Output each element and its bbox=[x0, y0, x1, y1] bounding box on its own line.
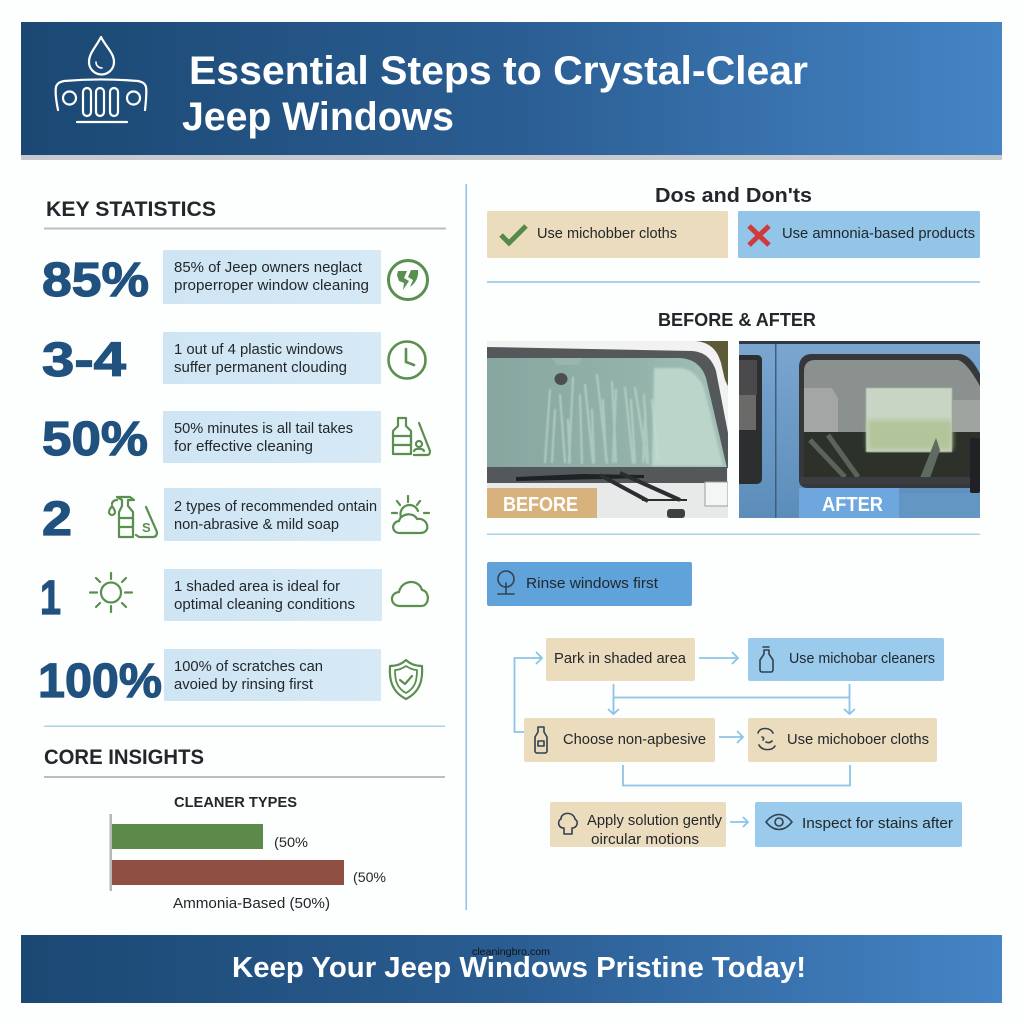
step: use cleaners: Use michobar cleaners bbox=[789, 650, 935, 667]
step: rinse windows first: Rinse windows first bbox=[526, 575, 659, 592]
bar chart: cleaner types bbox=[110, 794, 386, 912]
arrows: branch down bbox=[608, 684, 855, 714]
panel: process flow bbox=[487, 562, 962, 848]
stat row: 50%: 50% bbox=[42, 413, 148, 466]
panel: before and after bbox=[486, 310, 980, 518]
stat row: 100% bbox=[38, 649, 422, 708]
icon: shield check bbox=[390, 660, 422, 699]
arrow: choose to cloths bbox=[719, 731, 743, 743]
stat row: 85%: 85% of Jeep owners neglact bbox=[174, 259, 363, 276]
arrow: apply to inspect bbox=[730, 817, 748, 827]
label: after: AFTER bbox=[822, 494, 883, 516]
icon: cracked circle bbox=[388, 260, 428, 300]
don't card: Use amnonia-based products bbox=[782, 226, 975, 242]
stat row: 2: 2 bbox=[42, 493, 72, 546]
panel: dos and don'ts bbox=[487, 185, 980, 258]
step: inspect for stains: Inspect for stains after bbox=[802, 815, 953, 832]
icon: cloud bbox=[392, 582, 428, 606]
heading: before and after: BEFORE & AFTER bbox=[658, 310, 816, 330]
stat row: 85%: properroper window cleaning bbox=[174, 277, 369, 294]
stat row: 3-4: 1 out uf 4 plastic windows bbox=[174, 341, 343, 358]
header banner bbox=[21, 22, 1002, 160]
step: park in shaded area bbox=[546, 638, 695, 681]
stat row: 50%: 50% minutes is all tail takes bbox=[174, 420, 353, 437]
stat row: 50% bbox=[42, 411, 430, 466]
footer call to action: Keep Your Jeep Windows Pristine Today! bbox=[232, 952, 806, 984]
footer banner bbox=[21, 935, 1002, 1003]
heading: key statistics: KEY STATISTICS bbox=[46, 198, 216, 221]
stat row: 1 bbox=[40, 569, 428, 625]
stat row: 100%: 100% bbox=[38, 655, 162, 708]
don't card bbox=[738, 211, 980, 258]
connector: choose and cloths to next row bbox=[623, 765, 850, 786]
title: Essential Steps to Crystal-Clear bbox=[189, 49, 808, 93]
label: before bbox=[487, 488, 597, 518]
step: use cloths bbox=[748, 718, 937, 762]
stat row: 1: optimal cleaning conditions bbox=[174, 596, 355, 613]
stat row: 100%: avoied by rinsing first bbox=[174, 676, 314, 693]
stat row: 2: 2 types of recommended ontain bbox=[174, 498, 377, 515]
stat row: 3-4 bbox=[42, 332, 426, 387]
bar chart: cleaner types: (50% bbox=[353, 869, 386, 885]
do card bbox=[487, 211, 728, 258]
stat row: 1: 1 shaded area is ideal for bbox=[174, 578, 340, 595]
stat row: 85%: 85% bbox=[42, 254, 149, 307]
bar chart: cleaner types: (50% bbox=[274, 834, 308, 850]
icon: water drop over jeep grille bbox=[56, 37, 146, 122]
step: rinse windows first bbox=[487, 562, 692, 606]
label: after bbox=[799, 488, 899, 518]
step: apply solution: Apply solution gently bbox=[587, 812, 722, 829]
icon: spray bottle and soap: S bbox=[142, 520, 151, 535]
step: choose non-abrasive bbox=[524, 718, 715, 762]
icon: clock bbox=[388, 342, 426, 378]
step: choose non-abrasive: Choose non-apbesive bbox=[563, 731, 706, 748]
photo: after window bbox=[739, 341, 980, 518]
step: apply solution: oircular motions bbox=[591, 831, 699, 848]
label: before: BEFORE bbox=[503, 494, 578, 516]
step: apply solution bbox=[550, 802, 726, 848]
icon: cleaner bottles bbox=[393, 418, 430, 455]
arrow: park to cleaners bbox=[699, 652, 738, 664]
heading: dos and don'ts: Dos and Don'ts bbox=[655, 185, 812, 207]
icon: spray bottle and soap bbox=[109, 497, 157, 537]
title: Jeep Windows bbox=[182, 95, 454, 139]
stat row: 3-4: 3-4 bbox=[42, 334, 126, 387]
stat row: 3-4: suffer permanent clouding bbox=[174, 359, 347, 376]
do card: Use michobber cloths bbox=[537, 226, 677, 242]
stat row: 1: 1 bbox=[40, 572, 61, 625]
stat row: 85% bbox=[42, 250, 428, 307]
stat row: 100%: 100% of scratches can bbox=[174, 658, 323, 675]
step: park in shaded area: Park in shaded area bbox=[554, 650, 687, 667]
step: inspect for stains bbox=[755, 802, 962, 847]
column divider bbox=[466, 184, 467, 910]
bar chart: cleaner types: CLEANER TYPES bbox=[174, 794, 297, 811]
panel: key statistics bbox=[38, 198, 446, 708]
stat row: 50%: for effective cleaning bbox=[174, 438, 313, 455]
stat row: 2 bbox=[42, 488, 429, 546]
stat row: 2: non-abrasive & mild soap bbox=[174, 516, 339, 533]
title bbox=[182, 49, 808, 139]
icon: sun bbox=[90, 573, 132, 612]
source watermark: cleaningbro.com bbox=[472, 946, 550, 958]
photo: before windshield bbox=[486, 341, 728, 518]
section divider bbox=[44, 726, 445, 727]
step: use cleaners bbox=[748, 638, 944, 681]
step: use cloths: Use michoboer cloths bbox=[787, 731, 929, 748]
arrow: loop back to park bbox=[514, 652, 542, 732]
bar chart: cleaner types: Ammonia-Based (50%) bbox=[173, 895, 330, 912]
heading: core insights: CORE INSIGHTS bbox=[44, 746, 204, 769]
icon: sun behind cloud bbox=[392, 496, 429, 533]
panel: core insights bbox=[44, 746, 445, 912]
